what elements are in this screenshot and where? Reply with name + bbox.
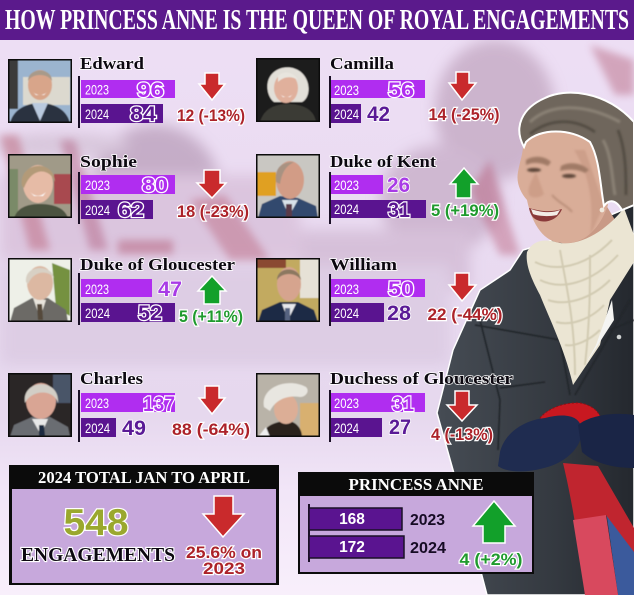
bar: 2024 (331, 302, 411, 325)
arrow: up (450, 168, 478, 198)
bar: 2023: 50 (388, 278, 414, 301)
portrait: Duke of Kent (256, 154, 320, 218)
change label: 5 (+19%) (431, 201, 499, 220)
arrow: down (199, 386, 225, 414)
change label: 88 (-64%) (172, 420, 250, 439)
bar: 2023: 56 (388, 79, 414, 102)
bar: 2024: 84 (130, 103, 156, 126)
bar: 2023: 26 (387, 174, 410, 197)
arrow: up (198, 276, 226, 304)
arrow: down (449, 72, 476, 100)
change label: 18 (-23%) (177, 202, 249, 221)
bar: 2024 (309, 536, 446, 558)
bar: 2024: 62 (118, 199, 144, 222)
panel: Camilla (256, 54, 500, 128)
panel: Duke of Gloucester (8, 255, 243, 326)
name: Camilla: Camilla (330, 54, 395, 73)
face details (526, 150, 604, 236)
change label (186, 543, 262, 578)
axis (78, 76, 80, 128)
axis (308, 504, 310, 562)
bar: 2024 (331, 103, 390, 126)
bar: 2024 (331, 416, 411, 439)
bar: 2024: 2024 (85, 305, 110, 321)
change label: 25.6% on (186, 543, 262, 562)
change label: 2023 (203, 559, 245, 578)
change label: 4 (-13%) (431, 425, 493, 444)
bar: 2023: 2023 (334, 395, 359, 411)
portrait: Duke of Gloucester (8, 258, 72, 322)
panel: Charles (8, 369, 250, 442)
axis (329, 76, 331, 128)
axis (78, 390, 80, 442)
arrow: down (197, 170, 226, 198)
name: Duke of Gloucester: Duke of Gloucester (80, 255, 235, 274)
bar: 2024: 2024 (85, 202, 110, 218)
bar: 2023 (309, 508, 445, 530)
bar: 2023 (81, 79, 175, 102)
portrait: William (256, 258, 320, 322)
panel: Sophie (8, 152, 249, 224)
bar: 2024: 2024 (334, 305, 359, 321)
arrow: up (473, 501, 515, 543)
big number: 548 (64, 502, 128, 543)
coat (437, 205, 634, 595)
bar: 2023: 47 (158, 278, 182, 301)
rosette (540, 403, 601, 425)
change label: 5 (+11%) (179, 307, 243, 326)
bar: 2024: 28 (387, 302, 411, 325)
bar: 2024: 2024 (85, 106, 109, 122)
bar: 2023 (331, 79, 425, 102)
collar (585, 300, 614, 365)
gloves (498, 416, 582, 471)
ribbons (600, 478, 634, 595)
bar: 2024 (81, 417, 146, 440)
hair highlights (530, 108, 626, 195)
bar: 2024: 172 (339, 539, 365, 556)
bar: 2024: 49 (122, 417, 146, 440)
bar: 2023 (81, 278, 182, 301)
change label: 12 (-13%) (177, 106, 245, 125)
bar: 2024: 27 (389, 416, 411, 439)
engagements label: ENGAGEMENTS (21, 544, 175, 566)
bar: 2024 (81, 199, 153, 222)
bar: 2024: 52 (138, 302, 162, 325)
bar: 2024 (331, 199, 426, 222)
axis (329, 390, 331, 442)
panel: Duchess of Gloucester (256, 369, 514, 444)
neck (550, 205, 618, 252)
heading: PRINCESS ANNE (348, 475, 484, 494)
bar: 2024: 2024 (85, 420, 110, 436)
bar: 2023 (331, 393, 425, 416)
axis (329, 274, 331, 326)
portrait: Sophie (8, 154, 72, 218)
bar: 2023: 2023 (334, 281, 359, 297)
bar: 2023: 2023 (85, 281, 109, 297)
portrait: Edward (8, 59, 72, 123)
arrow: down (203, 496, 244, 537)
scarf (527, 208, 634, 385)
panel: Duke of Kent (256, 152, 499, 224)
mouth (529, 208, 562, 222)
bar: 2023 (81, 174, 175, 197)
bar: 2024: 2024 (334, 420, 359, 436)
bar: 2024: 2024 (334, 201, 359, 217)
bar: 2024: 2024 (334, 106, 359, 122)
bar: 2024: 31 (388, 199, 410, 222)
bar: 2023: 2023 (85, 395, 109, 411)
bar: 2023: 137 (143, 393, 175, 416)
hair (519, 93, 634, 210)
change label: 4 (+2%) (460, 550, 522, 569)
bar: 2023: 2023 (334, 177, 359, 193)
panel: 2024 total Jan to April (9, 465, 279, 585)
arrow: down (447, 391, 477, 421)
bar: 2024 (81, 103, 163, 126)
bar: 2023: 2023 (85, 177, 110, 193)
axis (329, 172, 331, 224)
bar: 2023: 2023 (410, 512, 445, 529)
bar: 2024: 2024 (410, 540, 446, 557)
figure: Princess Anne photo (437, 93, 634, 595)
portrait: Duchess of Gloucester (256, 373, 320, 437)
change label: 14 (-25%) (428, 105, 500, 124)
name: Duke of Kent: Duke of Kent (330, 152, 436, 171)
axis (78, 172, 80, 224)
panel: Princess Anne (298, 472, 534, 574)
name: Edward: Edward (80, 54, 145, 73)
bar: 2023: 168 (339, 511, 365, 528)
bar: 2024 (81, 302, 175, 325)
bar: 2023: 96 (137, 79, 164, 102)
portrait: Charles (8, 373, 72, 437)
bar: 2023: 2023 (85, 82, 109, 98)
name: Charles: Charles (80, 369, 143, 388)
face (517, 127, 608, 243)
bar: 2023 (81, 393, 175, 416)
bar: 2023: 31 (392, 393, 414, 416)
name: Sophie: Sophie (80, 152, 138, 171)
heading: 2024 TOTAL JAN TO APRIL (38, 468, 250, 487)
coat details (475, 300, 634, 450)
arrow: down (199, 73, 225, 100)
panel: Edward (8, 54, 245, 128)
arrow: down (449, 273, 476, 301)
axis (78, 273, 80, 325)
bar: 2023: 80 (142, 174, 168, 197)
earring (600, 208, 604, 212)
change label: 22 (-44%) (428, 305, 502, 324)
bar: 2023 (331, 278, 425, 301)
name: William: William (330, 255, 397, 274)
bar: 2024: 42 (367, 103, 390, 126)
panel: William (256, 255, 502, 326)
portrait: Camilla (256, 58, 320, 122)
bar: 2023 (331, 174, 410, 197)
name: Duchess of Gloucester: Duchess of Gloucester (330, 369, 514, 388)
bar: 2023: 2023 (334, 82, 359, 98)
